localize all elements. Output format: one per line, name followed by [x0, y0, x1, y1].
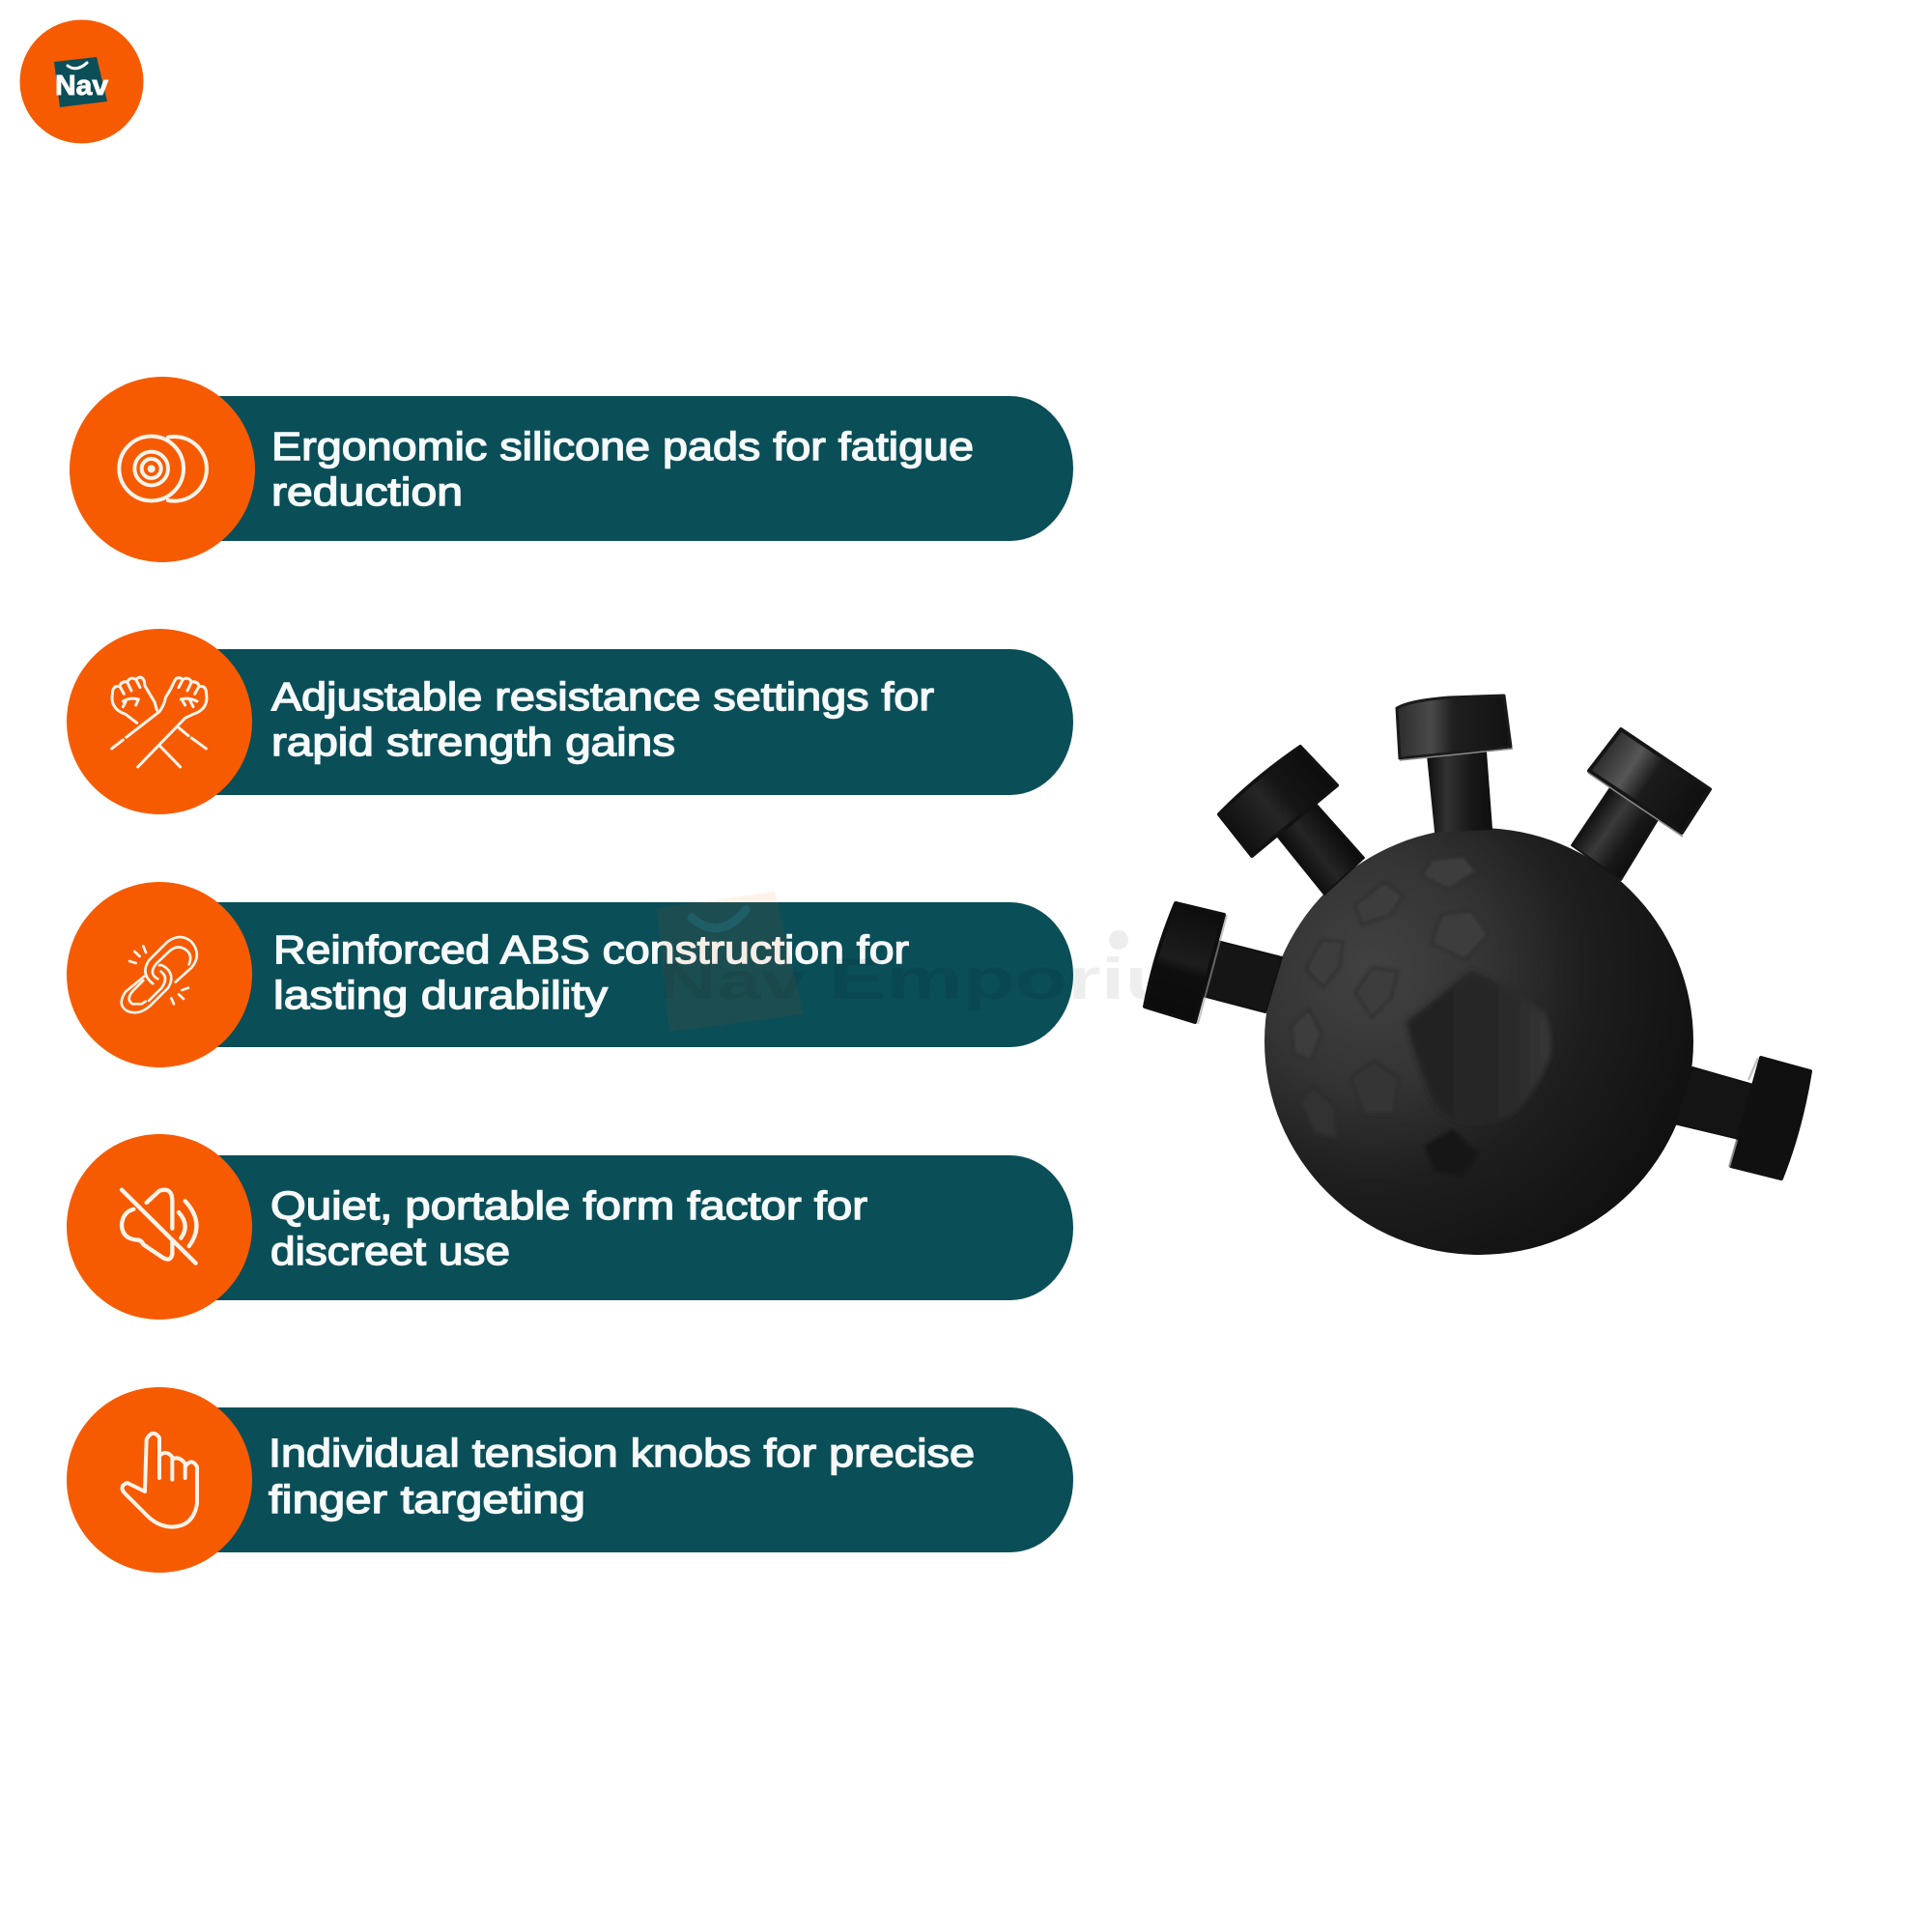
small pentagon facets — [1292, 857, 1488, 1177]
ball body — [1264, 828, 1693, 1255]
pill background — [208, 902, 1073, 1047]
product: massage ball with knobs — [1145, 696, 1810, 1255]
panel: row 4 quiet — [67, 1134, 1073, 1320]
feature text — [273, 927, 909, 1017]
pill background — [208, 1407, 1073, 1552]
large pentagon facet — [1406, 970, 1550, 1123]
pill background — [213, 396, 1073, 541]
feature text — [269, 1431, 975, 1521]
feature text: finger targeting — [269, 1477, 585, 1521]
icon: muted speaker — [122, 1190, 196, 1264]
feature text — [271, 674, 934, 764]
feature text: Reinforced ABS construction for — [273, 927, 909, 972]
upper right knob — [1572, 729, 1710, 880]
icon: pointing hand — [122, 1434, 197, 1527]
panel: row 5 tension knobs — [67, 1387, 1073, 1573]
feature text: Individual tension knobs for precise — [269, 1431, 975, 1475]
panel: row 2 resistance — [67, 629, 1073, 814]
watermark: Nav Emporium — [657, 892, 1254, 1032]
icon: chain link — [122, 937, 197, 1012]
pill background — [208, 649, 1073, 795]
pill background — [208, 1155, 1073, 1300]
upper left knob — [1219, 747, 1364, 895]
left knob — [1145, 903, 1282, 1024]
watermark: Nav Emporium: Emporium — [829, 947, 1254, 1011]
icon circle — [67, 1134, 252, 1320]
top knob — [1397, 696, 1513, 832]
logo badge: Nav — [55, 71, 108, 101]
icon circle — [67, 882, 252, 1067]
feature text — [270, 1183, 867, 1273]
feature text — [271, 424, 974, 514]
watermark: Nav Emporium: Nav — [659, 952, 806, 1010]
logo badge — [19, 19, 143, 143]
right knob — [1674, 1058, 1810, 1179]
panel: row 1 silicone pads — [70, 377, 1073, 562]
icon circle — [70, 377, 255, 562]
icon: raised crossed fists — [112, 677, 207, 767]
feature text: lasting durability — [273, 973, 609, 1017]
feature text: Adjustable resistance settings for — [271, 674, 934, 719]
feature text: Quiet, portable form factor for — [270, 1183, 867, 1228]
feature text: rapid strength gains — [271, 720, 675, 764]
icon circle — [67, 1387, 252, 1573]
icon: silicone pads — [119, 437, 207, 501]
panel: row 3 durability — [67, 882, 1073, 1067]
feature text: discreet use — [270, 1229, 510, 1273]
feature text: reduction — [271, 469, 463, 514]
feature text: Ergonomic silicone pads for fatigue — [271, 424, 974, 469]
icon circle — [67, 629, 252, 814]
